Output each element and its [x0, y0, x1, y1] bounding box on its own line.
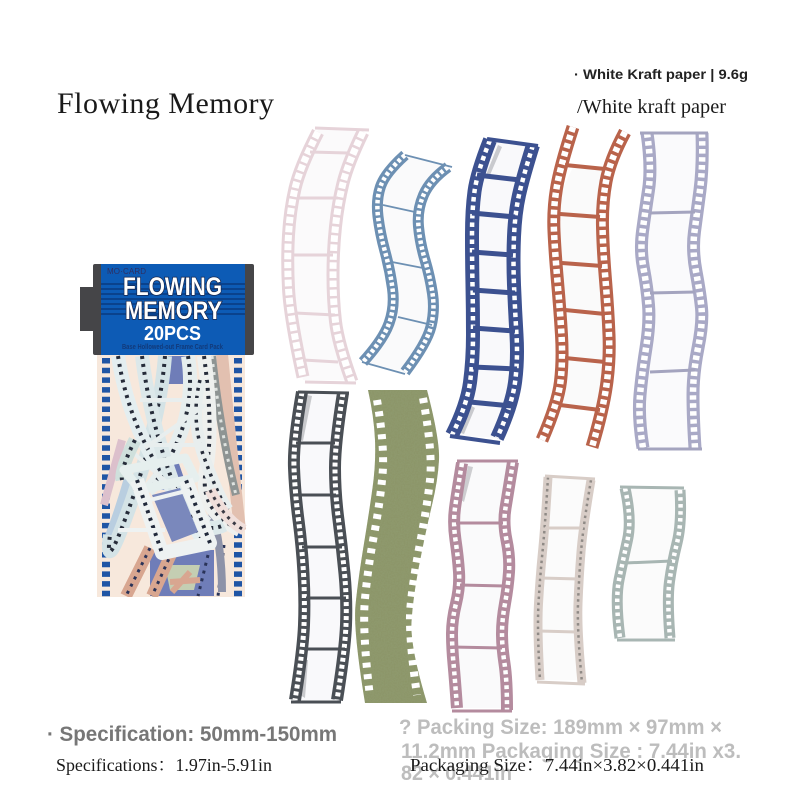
card header [93, 264, 254, 355]
strip: steel blue [362, 155, 452, 374]
strip: navy [450, 139, 538, 443]
packing size overlay text: 11.2mm Packaging Size : 7.44in x3. [401, 740, 741, 763]
card header: 20PCS [144, 323, 201, 345]
backing paper [97, 352, 245, 597]
paper type label: /White kraft paper [577, 96, 726, 118]
strip: pale pink [287, 128, 369, 383]
strip: mauve [452, 461, 518, 711]
pack name: FLOWING [123, 273, 222, 301]
strip: lavender [638, 133, 708, 449]
frame shadow [299, 395, 312, 698]
strip: olive green textured [355, 390, 439, 703]
card tab [80, 287, 95, 331]
paper weight label: · White Kraft paper | 9.6g [574, 66, 748, 82]
bundled film strips [104, 354, 244, 596]
card header: MEMORY [125, 297, 222, 325]
frame shadow [461, 466, 473, 502]
strip: grey green [615, 487, 684, 640]
packaging size inches: Packaging Size：7.44in×3.82×0.441in [410, 755, 704, 775]
packing size overlay text: ? Packing Size: 189mm × 97mm × [399, 716, 722, 739]
strip: slate [291, 392, 349, 702]
packing size overlay text [399, 716, 741, 785]
packing size overlay text: 82 × 0.441in [401, 762, 512, 785]
specification heading: · Specification: 50mm-150mm [47, 723, 337, 746]
specification inches: Specifications：1.97in-5.91in [56, 755, 272, 775]
strip: beige [537, 476, 595, 684]
strip: terracotta [542, 127, 625, 447]
header stripes [101, 284, 245, 314]
brand: MO·CARD [107, 267, 146, 276]
pack caption: Base Hollowed-out Frame Card Pack [122, 344, 223, 351]
frame shadow [458, 145, 502, 434]
title: Flowing Memory [57, 87, 274, 120]
product package [80, 264, 254, 597]
